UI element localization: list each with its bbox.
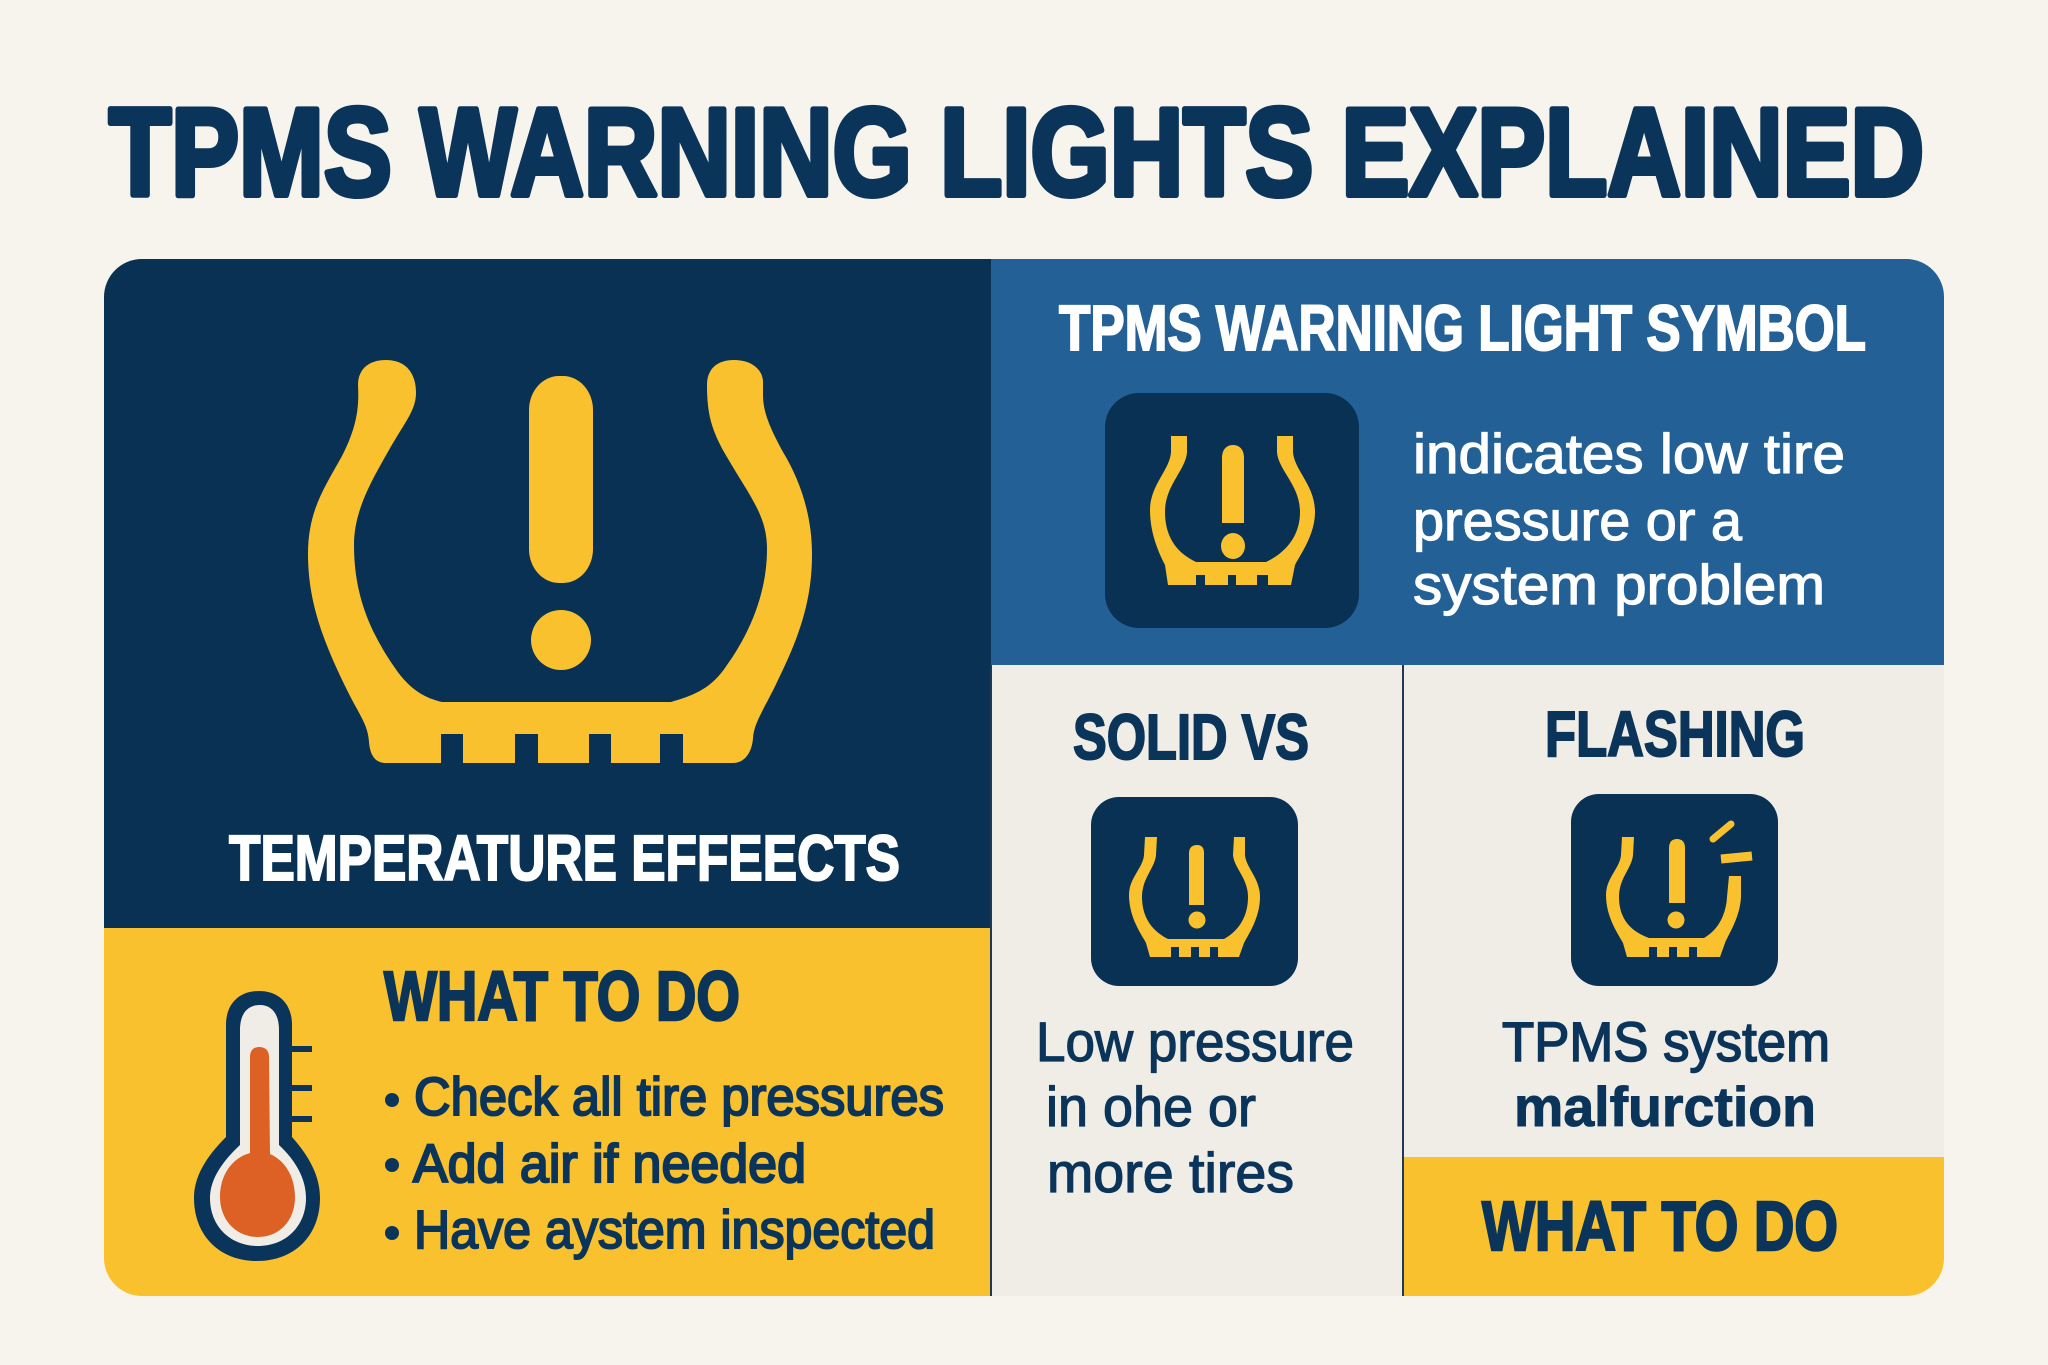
icon: large tire warning symbol <box>308 360 812 763</box>
heading: flashing: FLASHING <box>1545 698 1805 770</box>
text: flashing description: malfurction <box>1514 1075 1816 1138</box>
panel: what to do banner: WHAT TO DO <box>1482 1187 1838 1265</box>
heading: solid vs: SOLID VS <box>1073 701 1309 773</box>
text: description <box>1413 422 1845 616</box>
text: description: system problem <box>1413 553 1825 616</box>
icon: flashing tile <box>1571 794 1778 986</box>
list: actions: Check all tire pressures <box>414 1067 944 1127</box>
heading: warning light symbol: TPMS WARNING LIGHT SYMBOL <box>1059 292 1866 364</box>
text: solid description: in ohe or <box>1046 1075 1256 1138</box>
text: solid description: Low pressure <box>1036 1010 1354 1073</box>
list: actions <box>385 1067 944 1260</box>
panel: solid <box>1036 701 1354 1204</box>
heading: temperature effects: TEMPERATURE EFFEECTS <box>229 822 900 894</box>
text: description: pressure or a <box>1413 489 1743 552</box>
panel: what to do checklist <box>104 928 991 1296</box>
panel: warning light symbol <box>991 259 1944 665</box>
panel: main card <box>104 259 1944 1296</box>
heading: what to do: WHAT TO DO <box>384 957 740 1035</box>
icon: thermometer <box>194 991 320 1261</box>
panel: flashing <box>1403 698 1944 1296</box>
text: solid description: more tires <box>1047 1141 1294 1204</box>
text: flashing description: TPMS system <box>1502 1010 1830 1073</box>
list: actions: Have aystem inspected <box>414 1200 935 1260</box>
icon: solid tile <box>1091 797 1298 986</box>
icon: symbol tile <box>1105 393 1359 628</box>
panel: temperature effects <box>104 259 991 929</box>
list: actions: Add air if needed <box>413 1134 806 1194</box>
text: solid description <box>1040 1022 1352 1194</box>
text: description: indicates low tire <box>1413 422 1845 485</box>
panel: what to do banner <box>1403 1157 1944 1296</box>
text: flashing description <box>1502 1021 1828 1127</box>
